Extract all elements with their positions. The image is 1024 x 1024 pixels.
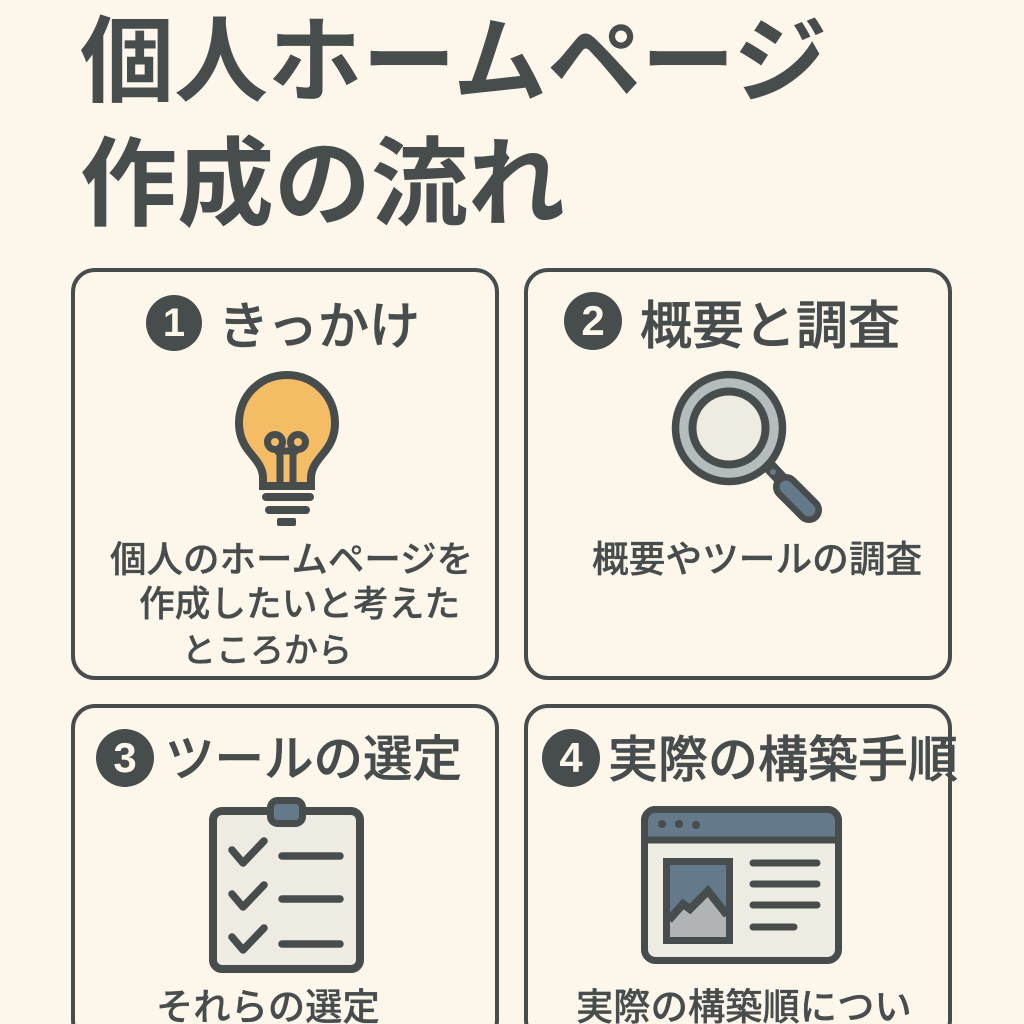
step 4 heading: 実際の構築手順 — [608, 732, 958, 788]
step 1 text — [110, 539, 473, 670]
step 3 heading: ツールの選定 — [165, 732, 462, 787]
step 1 heading: きっかけ — [218, 298, 420, 355]
step 1 number: 1 — [163, 301, 185, 345]
step 1 number — [146, 295, 202, 351]
step 1 text: ところから — [182, 632, 352, 670]
step 2 number — [564, 292, 622, 350]
step 2 number: 2 — [581, 297, 605, 344]
icon: light bulb — [235, 371, 339, 526]
panel: step 1 — [71, 268, 499, 680]
step 3 number: 3 — [113, 734, 137, 781]
panel: step 4 — [524, 704, 952, 1024]
icon: checklist — [209, 797, 364, 973]
step 2 heading: 概要と調査 — [640, 298, 900, 356]
title: 個人ホームページ — [80, 9, 827, 114]
step 3 number — [96, 729, 154, 787]
icon: web page — [641, 806, 842, 964]
panel: step 3 — [71, 704, 499, 1024]
step 4 number: 4 — [559, 734, 583, 781]
step 1 text: 個人のホームページを — [110, 539, 473, 580]
title: 作成の流れ — [80, 130, 565, 239]
title — [80, 9, 827, 239]
panel: step 2 — [524, 268, 952, 680]
icon: magnifying glass — [672, 370, 822, 523]
step 2 text: 概要やツールの調査 — [592, 539, 922, 580]
step 4 number — [542, 729, 600, 787]
step 1 text: 作成したいと考えた — [139, 584, 460, 624]
